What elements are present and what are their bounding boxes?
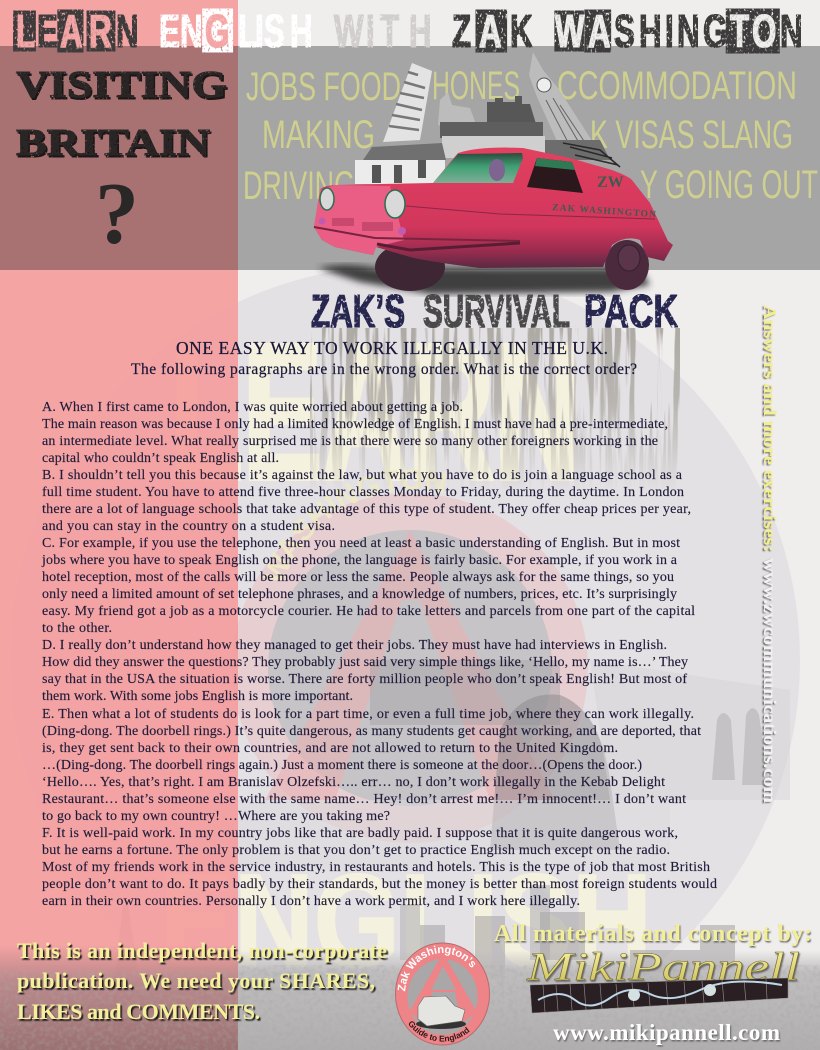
article body paragraphs: F. It is well-paid work. In my country jobs like that are badly paid. I suppose that it is quite dangerous work, [42,826,678,841]
article body paragraphs: an intermediate level. What really surprised me is that there were so many other foreigners working in the [42,434,658,449]
van lettering: ZW [597,174,624,191]
title: N [780,6,803,58]
title: E [159,6,180,58]
article heading: ONE EASY WAY TO WORK ILLEGALLY IN THE U.K. [176,338,608,358]
title: H [639,6,662,58]
article body paragraphs: them work. With some jobs English is more important. [42,689,353,704]
article body paragraphs: earn in their own countries. Personally I don’t have a work permit, and I work here illegally. [42,894,580,909]
article body paragraphs: A. When I first came to London, I was quite worried about getting a job. [42,400,463,415]
article body paragraphs: full time student. You have to attend five three-hour classes Monday to Friday, during the daytime. In London [42,485,684,500]
credit line: All materials and concept by: [494,921,812,947]
title [14,6,803,58]
headlights [320,188,334,210]
article body paragraphs: The main reason was because I only had a limited knowledge of English. I must have had a pre-intermediate, [42,417,668,432]
title: I [255,6,264,58]
left pink column overlay [0,0,238,1050]
watermark: faded logo, lettering and London photo: WASHINGTON [262,469,446,582]
title: K [510,6,533,58]
survival pack banner: ZAK’S [311,285,405,337]
survival pack banner [311,285,678,337]
title: A [60,6,83,58]
title: N [677,6,700,58]
wheels [375,243,445,291]
survival pack banner: PACK [584,285,678,337]
logo: Zak Washington's Guide to England: Guide to England [408,1021,470,1042]
windscreen [433,153,523,183]
watermark: faded logo, lettering and London photo: ENGLISH [160,847,652,994]
front panel [314,185,404,255]
body [314,148,673,268]
title: G [703,6,727,58]
heading: visiting Britain [16,64,227,164]
topic words on grey band [243,64,818,208]
article body paragraphs: How did they answer the questions? They probably just said very simple things like, ‘Hello, my name is…’ They [42,655,688,670]
heading: visiting Britain: VISITING [16,64,227,106]
title: S [614,6,635,58]
title: T [380,6,399,58]
article body paragraphs: is, they get sent back to their own countries, and are not allowed to return to the United Kingdom. [42,741,618,756]
article body paragraphs: people don’t want to do. It pays badly by their standards, but the money is better than most foreign students would [42,877,717,892]
skyline photo at the foot of the page [112,905,820,1050]
title: L [16,6,35,58]
signature: Miki Pannell: MikiPannell [526,944,800,989]
logo: Zak Washington's Guide to England [395,942,490,1046]
topic words on grey band: MAKING [262,113,375,157]
title: I [665,6,674,58]
article body paragraphs: but he earns a fortune. The only problem is that you don’t get to practice English much except on the radio. [42,843,670,858]
title: H [409,6,432,58]
sills and creases [314,227,520,241]
white house [363,143,446,160]
side window [527,158,583,193]
article body paragraphs: E. Then what a lot of students do is look for a part time, or even a full time job, where they can work illegally. [42,707,694,722]
indicators [318,218,326,224]
call to action text [17,938,387,1024]
roof rack [563,143,620,167]
title: R [89,6,112,58]
survival pack banner: SURVIVAL [423,285,570,337]
article body paragraphs: hotel reception, most of the calls will be more or less the same. People always ask for the same things, so you [42,570,674,585]
three-wheeled pink van [314,143,673,294]
dark pink band behind the header [0,46,238,270]
article body paragraphs: Most of my friends work in the service industry, in restaurants and hotels. This is the type of job that most British [42,860,710,875]
title: T [730,6,749,58]
article body paragraphs: D. I really don’t understand how they managed to get their jobs. They must have had interviews in English. [42,638,667,653]
logo: Zak Washington's Guide to England: Zak Washington’s [398,946,476,992]
heading: visiting Britain: BRITAIN [16,122,210,164]
title: S [264,6,285,58]
title: G [205,6,229,58]
title: H [290,6,313,58]
article body paragraphs: and you can stay in the country on a student visa. [42,519,335,534]
title: W [555,6,585,58]
article body paragraphs: C. For example, if you use the telephone, then you need at least a basic understanding of English. But in most [42,536,680,551]
article body paragraphs: to go back to my own country! …Where are you taking me? [42,809,390,824]
three-wheeled pink van: ZAK WASHINGTON [552,203,656,220]
article body paragraphs [41,400,717,909]
watermark: faded logo, lettering and London photo [160,273,800,994]
grille [332,218,393,231]
watermark: faded logo, lettering and London photo: LEARN [170,304,580,519]
Westminster [438,92,478,130]
title: I [366,6,375,58]
title: N [116,6,139,58]
guitar fretboard inlay [530,978,788,1013]
tower block [383,63,432,142]
website link: www.mikipannell.com [553,1020,780,1045]
drips under the survival pack banner [310,328,680,493]
title: W [334,6,364,58]
topic words on grey band: HONES [432,64,520,108]
article body paragraphs: easy. My friend got a job as a motorcycle courier. He had to take letters and parcels from one part of the capital [42,604,695,619]
article body paragraphs: jobs where you have to speak English on the phone, the language is fairly basic. For example, if you work in a [41,553,678,568]
skyline tinted through the pink column [0,945,238,1050]
article body paragraphs: there are a lot of language schools that take advantage of this type of student. They offer cheap prices per year, [42,502,691,517]
article body paragraphs: capital who couldn’t speak English at all. [42,451,279,466]
call to action text: publication. We need your SHARES, [17,968,375,993]
topic words on grey band: JOBS FOOD [246,65,401,109]
article body paragraphs: (Ding-dong. The doorbell rings.) It’s quite dangerous, as many students get caught working, and are deported, that [42,724,701,739]
vertical website note: Answers and more exercises: [760,305,780,552]
article body paragraphs: B. I shouldn’t tell you this because it’s against the law, but what you have to do is join a language school as a [42,468,683,483]
title: E [37,6,58,58]
article body paragraphs: to the other. [42,621,112,636]
call to action text: This is an independent, non-corporate [17,938,387,963]
Big Ben [529,52,598,152]
title: Z [452,6,471,58]
article body paragraphs: …(Ding-dong. The doorbell rings again.) Just a moment there is someone at the door…(Opens the door.) [42,758,642,773]
article body paragraphs: only need a limited amount of set telephone phrases, and a knowledge of numbers, prices, etc. It’s surprisingly [42,587,677,602]
grey band behind the header [238,46,820,270]
title: O [752,6,776,58]
vertical website note: www.zwcommunications.com [760,558,780,803]
vertical website note [760,305,780,803]
article instruction: The following paragraphs are in the wrong order. What is the correct order? [131,361,637,378]
title: A [588,6,611,58]
title: N [180,6,203,58]
title: L [238,6,257,58]
article body paragraphs: ‘Hello…. Yes, that’s right. I am Branislav Olzefski….. err… no, I don’t work illegally in the Kebab Delight [42,775,665,790]
call to action text: LIKES and COMMENTS. [17,999,260,1024]
question mark: ? [95,166,139,263]
London landmarks illustration [355,52,610,184]
article body paragraphs: say that in the USA the situation is worse. There are forty million people who don’t speak English! But most of [42,672,687,687]
title: A [479,6,502,58]
article body paragraphs: Restaurant… that’s someone else with the same name… Hey! don’t arrest me!… I’m innocent!… I don’t want [42,792,686,807]
topic words on grey band: DRIVING [243,164,355,208]
